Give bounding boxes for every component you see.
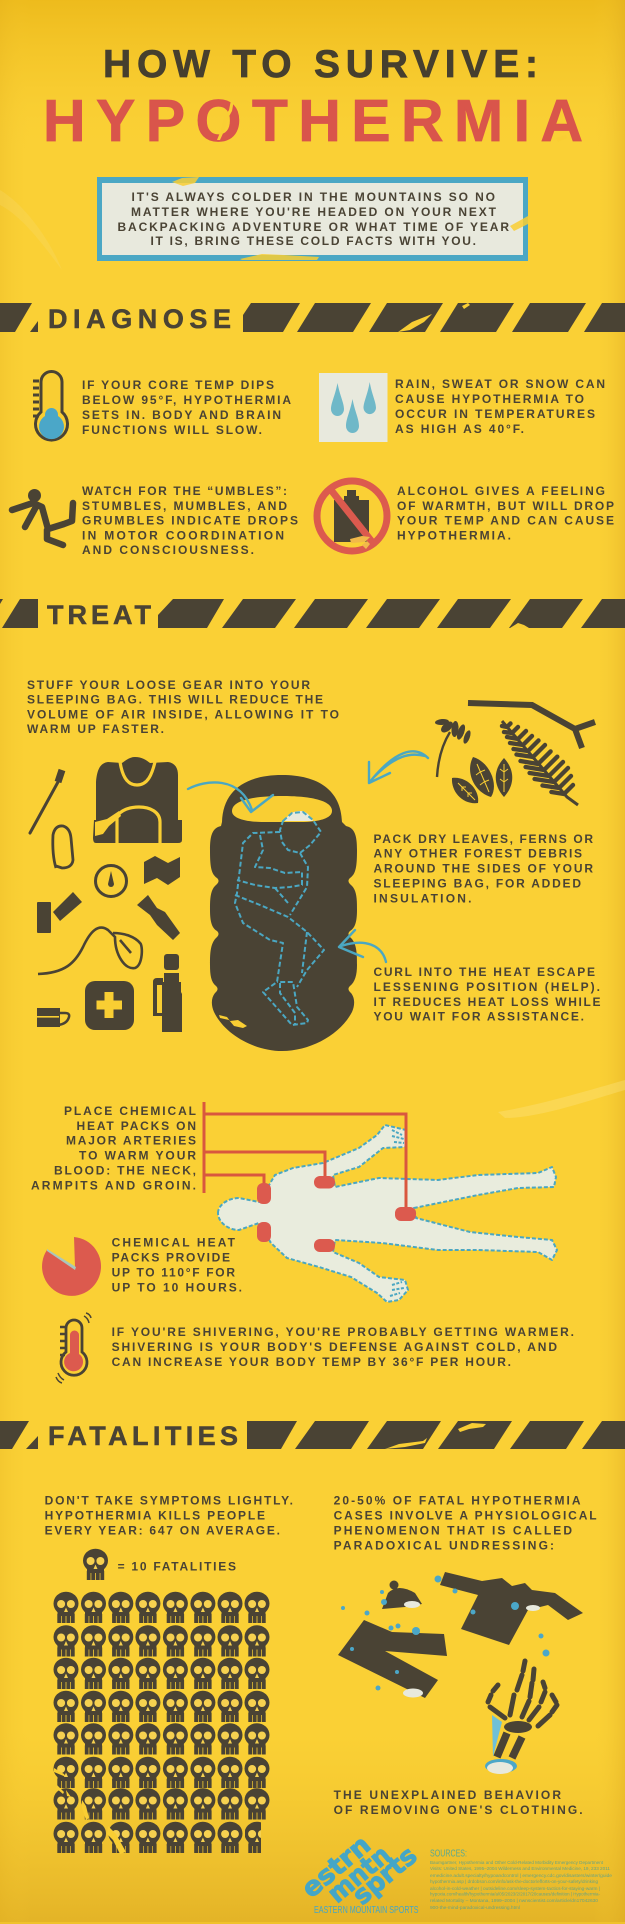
text: place heat packs: MAJOR ARTERIES bbox=[66, 1134, 196, 1148]
text: pack dry leaves: PACK DRY LEAVES, FERNS OR bbox=[374, 832, 593, 846]
text: fatal numbers: DON'T TAKE SYMPTOMS LIGHTLY. bbox=[45, 1494, 293, 1508]
text: curl help position: LESSENING POSITION (HELP). bbox=[374, 980, 600, 994]
sources text bbox=[430, 1860, 612, 1910]
text: shivering: IF YOU'RE SHIVERING, YOU'RE PROBABLY GETTING WARMER. bbox=[112, 1325, 574, 1339]
title line: hypothermia: HYPOTHERMIA bbox=[43, 88, 583, 154]
text: paradoxical undressing: 20-50% OF FATAL HYPOTHERMIA bbox=[334, 1494, 581, 1508]
icon: snowflakes and drops bbox=[341, 1576, 550, 1690]
text: place heat packs: BLOOD: THE NECK, bbox=[54, 1164, 196, 1178]
body outline bbox=[218, 1125, 557, 1302]
text: stuff your gear bbox=[27, 678, 339, 736]
intro text: IT'S ALWAYS COLDER IN THE MOUNTAINS SO NO bbox=[132, 190, 495, 204]
sources text: Baumgartner, Hypothermia and Other Cold-Related Morbidity Emergency Department bbox=[430, 1860, 604, 1865]
icon: leaves bbox=[452, 757, 512, 803]
text: pack dry leaves bbox=[374, 832, 593, 905]
text: curl help position: IT REDUCES HEAT LOSS WHILE bbox=[374, 995, 600, 1009]
icon: toothbrush bbox=[30, 770, 62, 833]
icon: mug bbox=[37, 1008, 69, 1027]
hand fingers bbox=[390, 1130, 404, 1296]
text: place heat packs: ARMPITS AND GROIN. bbox=[31, 1178, 196, 1192]
text: umbles: WATCH FOR THE “UMBLES”: bbox=[82, 484, 287, 498]
text: curl help position: CURL INTO THE HEAT ESCAPE bbox=[374, 965, 595, 979]
text: rain sweat snow bbox=[395, 377, 605, 436]
text: stuff your gear: STUFF YOUR LOOSE GEAR INTO YOUR bbox=[27, 678, 310, 692]
icon: backpack bbox=[93, 757, 182, 843]
text: paradoxical undressing: PHENOMENON THAT IS CALLED bbox=[334, 1523, 572, 1537]
text: core temp: IF YOUR CORE TEMP DIPS bbox=[82, 378, 274, 392]
sources text: related Mortality – Montana, 1999–2004 | nwnscientist.com/article/dn17042630 bbox=[430, 1898, 598, 1903]
text: alcohol: ALCOHOL GIVES A FEELING bbox=[397, 484, 605, 498]
section bar: fatalities bbox=[0, 1421, 625, 1451]
sources heading: SOURCES: bbox=[430, 1848, 467, 1860]
text: core temp: SETS IN. BODY AND BRAIN bbox=[82, 408, 281, 422]
icon: pants bbox=[338, 1620, 447, 1698]
icon: fern bbox=[502, 721, 578, 805]
icon: skeleton hand bbox=[485, 1661, 557, 1774]
text: shivering bbox=[112, 1325, 574, 1369]
icon: hat bbox=[382, 1580, 422, 1609]
intro text: IT IS, BRING THESE COLD FACTS WITH YOU. bbox=[150, 234, 476, 248]
icon: flower bbox=[435, 718, 472, 777]
skull grid bbox=[54, 1592, 270, 1854]
icon: map bbox=[144, 856, 180, 885]
text: umbles bbox=[82, 484, 298, 557]
icon: no alcohol flask bbox=[317, 481, 387, 551]
icon: stumbling figure bbox=[12, 489, 73, 545]
text: fatal numbers: EVERY YEAR: 647 ON AVERAGE. bbox=[45, 1523, 280, 1537]
text: umbles: GRUMBLES INDICATE DROPS bbox=[82, 514, 298, 528]
text: place heat packs: HEAT PACKS ON bbox=[76, 1119, 196, 1133]
text: alcohol: HYPOTHERMIA. bbox=[397, 528, 511, 542]
logo: eastern mountain sports: estrn bbox=[296, 1830, 377, 1904]
icon: rain drops bbox=[319, 373, 388, 442]
text: heat pack duration: UP TO 110°F FOR bbox=[112, 1266, 235, 1280]
text: core temp: BELOW 95°F, HYPOTHERMIA bbox=[82, 393, 291, 407]
icon: sweater bbox=[440, 1572, 583, 1645]
text: pack dry leaves: SLEEPING BAG, FOR ADDED bbox=[374, 877, 581, 891]
section bar: treat bbox=[0, 599, 625, 630]
text: umbles: AND CONSCIOUSNESS. bbox=[82, 543, 254, 557]
text: curl help position bbox=[374, 965, 600, 1024]
text: umbles: STUMBLES, MUMBLES, AND bbox=[82, 499, 287, 513]
sources text: hypoxia.com/health/hypothermia/a/05/2023/2/2017/20causes/definition | Hypothermia- bbox=[430, 1892, 600, 1896]
text: heat pack duration: PACKS PROVIDE bbox=[112, 1251, 230, 1265]
heat pack: armpit lower bbox=[314, 1239, 335, 1252]
logo: eastern mountain sports: sprts bbox=[347, 1841, 423, 1911]
icon: thermometer bbox=[33, 372, 68, 440]
intro text bbox=[118, 190, 509, 248]
text: rain sweat snow: AS HIGH AS 40°F. bbox=[395, 422, 524, 436]
heat pack: groin bbox=[395, 1207, 416, 1221]
sources text: hypothermia.asp | drdobson.com/info/ask-the-doctor/efforts-on-your-safety/drinking bbox=[430, 1879, 598, 1884]
title line: how to survive: HOW TO SURVIVE: bbox=[103, 43, 538, 86]
text: unexplained behavior bbox=[334, 1788, 583, 1817]
icon: branch bbox=[468, 703, 595, 748]
text: rain sweat snow: RAIN, SWEAT OR SNOW CAN bbox=[395, 377, 605, 391]
icon: rope bbox=[38, 928, 142, 974]
legend: skull equals ten fatalities: = 10 FATALITIES bbox=[118, 1560, 236, 1574]
sources text: alcohol-in-cold-weather | outsideline.com/sleep-system-tactics-for-staying-warm | bbox=[430, 1886, 600, 1891]
text: place heat packs: TO WARM YOUR bbox=[79, 1149, 196, 1163]
text: shivering: CAN INCREASE YOUR BODY TEMP BY 36°F PER HOUR. bbox=[112, 1355, 511, 1369]
text: heat pack duration: UP TO 10 HOURS. bbox=[112, 1281, 242, 1295]
intro text: MATTER WHERE YOU'RE HEADED ON YOUR NEXT bbox=[131, 205, 497, 219]
icon: first aid kit bbox=[85, 981, 134, 1030]
dashed figure bbox=[235, 812, 324, 1025]
text: rain sweat snow: OCCUR IN TEMPERATURES bbox=[395, 407, 595, 421]
heat pack: neck bbox=[257, 1183, 271, 1204]
icon: battery and matchbox bbox=[37, 892, 82, 933]
arrow: curl position bbox=[339, 930, 386, 962]
text: paradoxical undressing bbox=[334, 1494, 597, 1552]
text: stuff your gear: SLEEPING BAG. THIS WILL REDUCE THE bbox=[27, 693, 323, 707]
heat pack: armpit upper bbox=[314, 1176, 335, 1188]
icon: carabiner bbox=[53, 826, 73, 868]
text: pack dry leaves: ANY OTHER FOREST DEBRIS bbox=[374, 847, 582, 861]
text: fatal numbers bbox=[45, 1494, 293, 1537]
icon: flashlight bbox=[137, 895, 180, 940]
sleeping bag bbox=[210, 775, 357, 1051]
sources text: Visits: United States, 1995–2004 Wilderness and Environmental Medicine, 19, 233 2011 bbox=[430, 1866, 610, 1871]
heading: diagnose: DIAGNOSE bbox=[48, 304, 231, 334]
legend: skull equals ten fatalities bbox=[83, 1549, 236, 1580]
text: place heat packs: PLACE CHEMICAL bbox=[64, 1104, 196, 1118]
forest debris icons bbox=[435, 703, 595, 805]
title bbox=[43, 43, 583, 154]
heat pack: neck lower bbox=[257, 1222, 271, 1242]
text: stuff your gear: WARM UP FASTER. bbox=[27, 722, 164, 736]
icon: compass bbox=[96, 866, 126, 896]
text: rain sweat snow: CAUSE HYPOTHERMIA TO bbox=[395, 392, 584, 406]
sources bbox=[430, 1848, 612, 1910]
gear icons bbox=[30, 757, 182, 1032]
connector lines bbox=[204, 1102, 406, 1207]
text: pack dry leaves: INSULATION. bbox=[374, 891, 472, 905]
text: stuff your gear: VOLUME OF AIR INSIDE, ALLOWING IT TO bbox=[27, 707, 339, 721]
text: fatal numbers: HYPOTHERMIA KILLS PEOPLE bbox=[45, 1509, 265, 1523]
logo: eastern mountain sports bbox=[296, 1830, 423, 1916]
intro box bbox=[97, 177, 528, 261]
text: alcohol bbox=[397, 484, 614, 542]
body diagram bbox=[204, 1102, 557, 1302]
text: umbles: IN MOTOR COORDINATION bbox=[82, 528, 284, 542]
intro text: BACKPACKING ADVENTURE OR WHAT TIME OF YEAR bbox=[118, 220, 509, 234]
text: unexplained behavior: OF REMOVING ONE'S CLOTHING. bbox=[334, 1803, 583, 1817]
icon: snow cuffs bbox=[403, 1688, 423, 1698]
sources text: emedicine.adult.specialty/hypoandcontrol | emergency.cdc.gov/disasters/winter/guide bbox=[430, 1873, 612, 1878]
discarded clothing bbox=[338, 1572, 583, 1698]
logo: eastern mountain sports: mntn bbox=[322, 1840, 397, 1909]
text: alcohol: YOUR TEMP AND CAN CAUSE bbox=[397, 514, 614, 528]
text: heat pack duration: CHEMICAL HEAT bbox=[112, 1236, 236, 1250]
text: core temp bbox=[82, 378, 291, 437]
pie chart: heat pack bbox=[42, 1237, 101, 1296]
text: paradoxical undressing: CASES INVOLVE A PHYSIOLOGICAL bbox=[334, 1509, 597, 1523]
icon: shivering thermometer bbox=[56, 1313, 91, 1383]
section bar: diagnose bbox=[0, 303, 625, 334]
text: paradoxical undressing: PARADOXICAL UNDRESSING: bbox=[334, 1538, 554, 1552]
sources text: 900-the-mind-paradoxical-undressing.html bbox=[430, 1905, 520, 1910]
heading: fatalities: FATALITIES bbox=[48, 1421, 238, 1451]
text: core temp: FUNCTIONS WILL SLOW. bbox=[82, 423, 262, 437]
arrow: gear to bag bbox=[188, 782, 273, 812]
text: alcohol: OF WARMTH, BUT WILL DROP bbox=[397, 499, 614, 513]
logo: eastern mountain sports: EASTERN MOUNTAIN SPORTS bbox=[314, 1905, 419, 1916]
text: place heat packs bbox=[31, 1104, 196, 1192]
arrow: forest debris to bag bbox=[369, 751, 428, 783]
text: unexplained behavior: THE UNEXPLAINED BEHAVIOR bbox=[334, 1788, 561, 1802]
text: pack dry leaves: AROUND THE SIDES OF YOUR bbox=[374, 862, 593, 876]
text: curl help position: YOU WAIT FOR ASSISTANCE. bbox=[374, 1010, 584, 1024]
heading: treat: TREAT bbox=[47, 600, 152, 630]
text: shivering: SHIVERING IS YOUR BODY'S DEFENSE AGAINST COLD, AND bbox=[112, 1340, 557, 1354]
icon: thermos bbox=[153, 954, 182, 1032]
text: heat pack duration bbox=[112, 1236, 242, 1295]
